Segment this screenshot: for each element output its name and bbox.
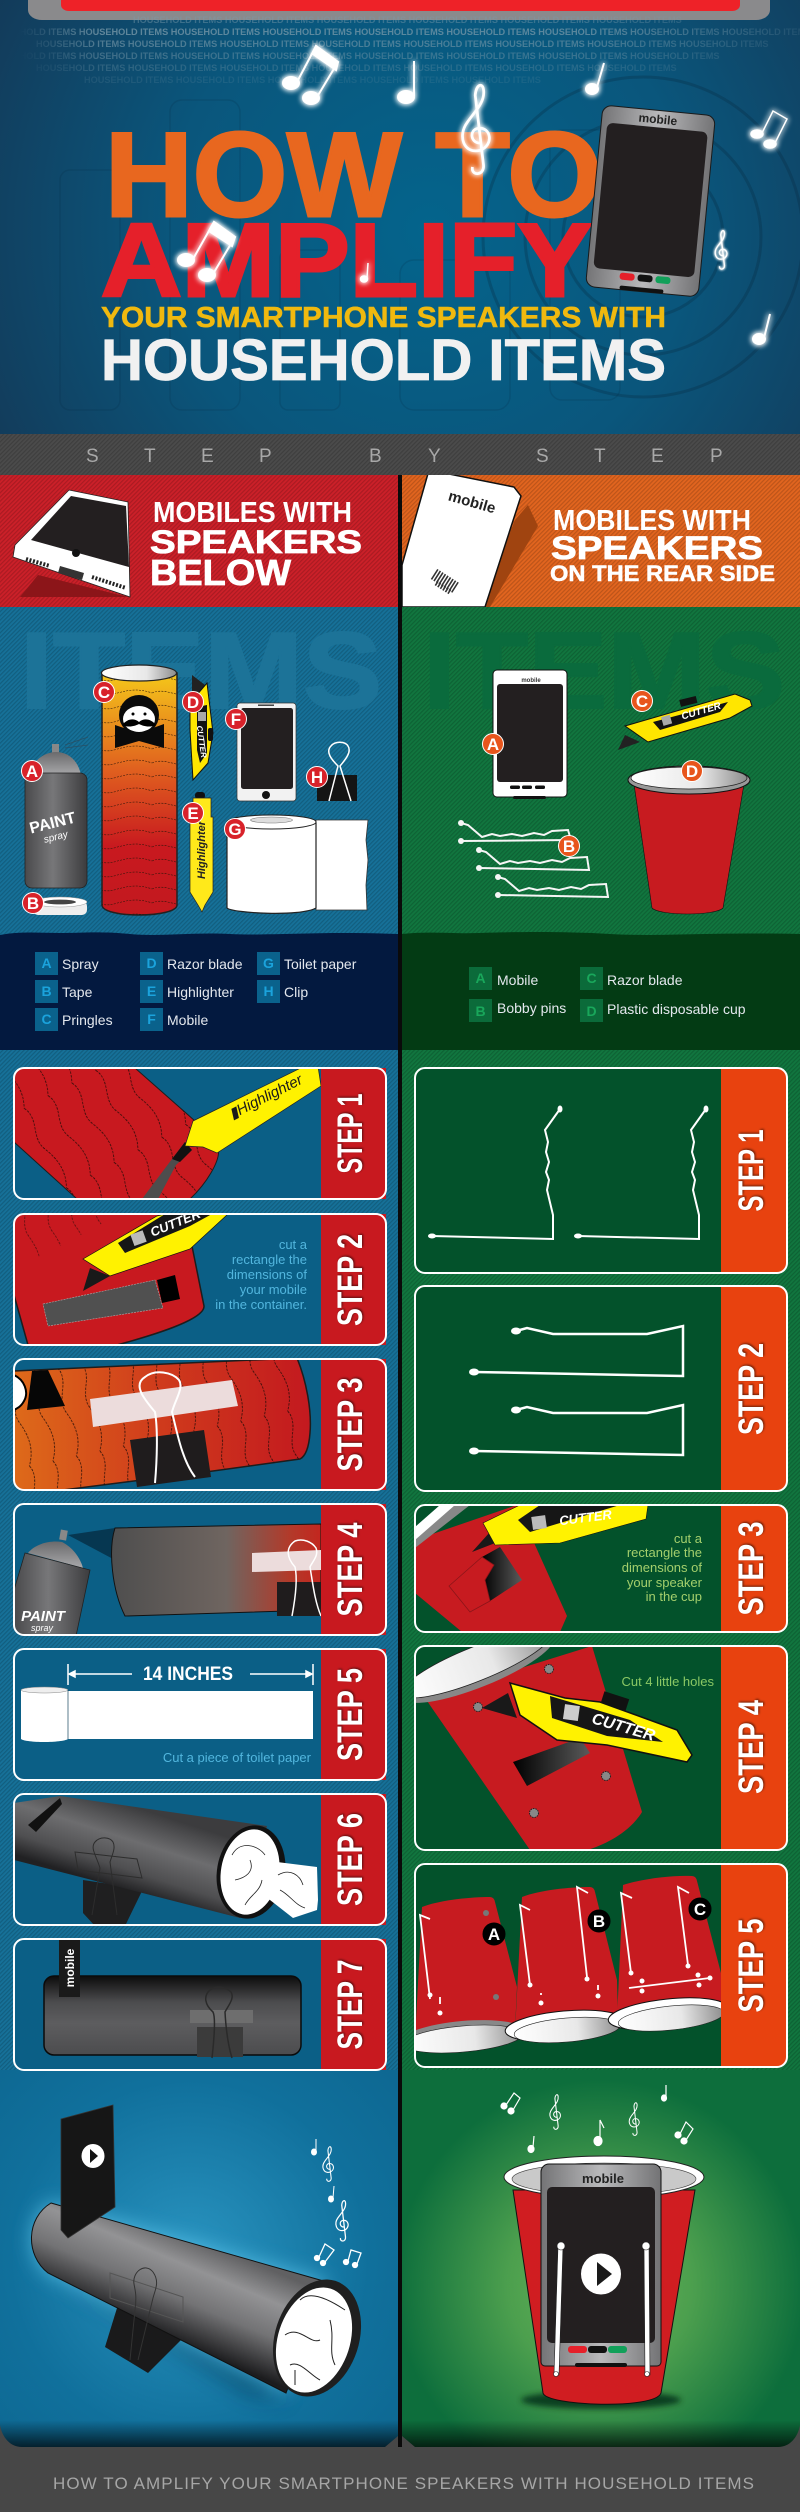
legend letters: B bbox=[41, 983, 52, 999]
dimension arrows bbox=[68, 1664, 313, 1685]
legend labels: Bobby pins bbox=[497, 1000, 566, 1016]
subtitle white: HOUSEHOLD ITEMS bbox=[101, 328, 666, 393]
step label: STEP 2 bbox=[331, 1234, 370, 1326]
item badges: D bbox=[686, 762, 698, 781]
item badges bbox=[482, 690, 702, 856]
legend labels: Plastic disposable cup bbox=[607, 1001, 746, 1017]
item badges: C bbox=[636, 692, 648, 711]
panel: left step 1 bbox=[14, 1060, 386, 1199]
icon: pringles can bbox=[102, 665, 177, 915]
icon: tape bbox=[33, 897, 87, 915]
icon: painted tube bbox=[31, 2203, 327, 2393]
step label: STEP 2 bbox=[732, 1343, 771, 1435]
instruction text: rectangle the bbox=[627, 1545, 702, 1560]
icon: spray can: PAINT bbox=[28, 810, 78, 837]
panel: header mobiles with speakers on the rear side bbox=[402, 470, 800, 607]
repeating background words: HOUSEHOLD ITEMS HOUSEHOLD ITEMS HOUSEHOLD ITEMS HOUSEHOLD ITEMS HOUSEHOLD ITEMS HOUSEHOLD ITEMS HOUSEHOLD ITEMS bbox=[36, 63, 677, 73]
heading text: SPEAKERS bbox=[551, 530, 763, 566]
item badges: C bbox=[98, 683, 110, 702]
instruction text: your mobile bbox=[240, 1282, 307, 1297]
title: amplify: AMPLIFY bbox=[101, 203, 592, 319]
left legend bbox=[0, 932, 398, 1050]
legend letters bbox=[475, 970, 597, 1019]
footer text: HOW TO AMPLIFY YOUR SMARTPHONE SPEAKERS WITH HOUSEHOLD ITEMS bbox=[53, 2474, 754, 2493]
panel: right step 3 bbox=[415, 1505, 787, 1632]
step label: STEP 1 bbox=[331, 1094, 370, 1174]
legend letters: H bbox=[263, 983, 274, 999]
legend letters: D bbox=[586, 1003, 597, 1019]
illustration: toilet paper roll bbox=[21, 1687, 313, 1742]
icon: red cup bbox=[504, 2156, 704, 2404]
item badges: A bbox=[487, 735, 499, 754]
step label: STEP 5 bbox=[331, 1668, 370, 1761]
illustration: cutting the cup: CUTTER bbox=[558, 1507, 613, 1528]
panel: right step 2 bbox=[415, 1286, 787, 1491]
legend letters: G bbox=[263, 955, 274, 971]
icon: treble clef large bbox=[463, 85, 489, 174]
panel: right step 5 bbox=[400, 1864, 787, 2067]
instruction text: cut a bbox=[674, 1531, 703, 1546]
instruction text: in the cup bbox=[646, 1589, 702, 1604]
step label: STEP 3 bbox=[331, 1378, 370, 1472]
legend labels: Toilet paper bbox=[284, 956, 357, 972]
icon: spray can bbox=[25, 737, 88, 888]
heading text: BELOW bbox=[150, 552, 291, 593]
illustration: cutting the can: CUTTER bbox=[148, 1206, 203, 1240]
subtitle yellow: YOUR SMARTPHONE SPEAKERS WITH bbox=[101, 302, 666, 334]
instruction text: cut a bbox=[279, 1237, 308, 1252]
icon: highlighter bbox=[190, 792, 213, 912]
instruction text: in the container. bbox=[215, 1297, 307, 1312]
heading text: MOBILES WITH bbox=[153, 497, 352, 529]
legend letters: E bbox=[147, 983, 156, 999]
step label: STEP 1 bbox=[732, 1130, 771, 1212]
icon: mobile bbox=[493, 670, 567, 799]
illustration: tube with mobile inserted bbox=[44, 1939, 301, 2058]
heading text bbox=[150, 497, 362, 593]
item badges: E bbox=[187, 804, 199, 823]
step label: STEP 4 bbox=[732, 1700, 771, 1794]
illustration: highlighter marking the can bbox=[14, 1060, 321, 1199]
icon: mobile standing in tube bbox=[61, 2105, 115, 2238]
left items illustration bbox=[22, 665, 368, 915]
instruction text: dimensions of bbox=[227, 1267, 307, 1282]
item badges: H bbox=[311, 768, 323, 787]
illustration: cutting the can bbox=[14, 1206, 228, 1345]
illustration: spray painting the can: spray bbox=[31, 1623, 54, 1633]
step label: STEP 3 bbox=[732, 1522, 771, 1616]
panel: left step 7 bbox=[14, 1939, 386, 2070]
icon: treble clefs bbox=[550, 2095, 639, 2135]
instruction text: Cut 4 little holes bbox=[622, 1674, 714, 1689]
panel: right step 1 bbox=[415, 1068, 787, 1273]
illustration: cutting holes in the cup bbox=[416, 1647, 693, 1849]
icon: clip and tape outlines bbox=[110, 2268, 183, 2360]
icon: binder clip stand bbox=[105, 2308, 181, 2373]
icon: razor blade: CUTTER bbox=[195, 725, 208, 759]
step label: STEP 7 bbox=[331, 1960, 370, 2050]
illustration: cutting holes in the cup: CUTTER bbox=[590, 1711, 657, 1745]
heading text: ON THE REAR SIDE bbox=[550, 561, 775, 586]
bottom vignette bbox=[0, 2420, 800, 2447]
icon: tube opening with paper bbox=[259, 2268, 375, 2408]
watermark: items left: ITEMS bbox=[20, 610, 382, 732]
step label: STEP 6 bbox=[331, 1813, 370, 1906]
icon: mobile phone bbox=[237, 703, 296, 801]
dimension label: 14 INCHES bbox=[143, 1664, 233, 1685]
item badges: F bbox=[231, 710, 241, 729]
legend letters: A bbox=[475, 970, 486, 986]
right legend bbox=[402, 932, 800, 1050]
step by step banner bbox=[0, 434, 800, 475]
repeating background words: HOUSEHOLD ITEMS HOUSEHOLD ITEMS HOUSEHOLD ITEMS HOUSEHOLD ITEMS HOUSEHOLD ITEMS HOUSEHOLD ITEMS HOUSEHOLD ITEMS HOUSEHOLD ITEMS bbox=[0, 51, 719, 61]
illustration: cutting the cup bbox=[415, 1505, 648, 1632]
heading text: MOBILES WITH bbox=[553, 505, 751, 537]
icon: razor blade: CUTTER bbox=[680, 701, 723, 722]
instruction text bbox=[622, 1531, 703, 1604]
repeating background words: HOUSEHOLD ITEMS HOUSEHOLD ITEMS HOUSEHOLD ITEMS HOUSEHOLD ITEMS HOUSEHOLD ITEMS bbox=[84, 75, 541, 85]
repeating background words: HOUSEHOLD ITEMS HOUSEHOLD ITEMS HOUSEHOLD ITEMS HOUSEHOLD ITEMS HOUSEHOLD ITEMS HOUSEHOLD ITEMS HOUSEHOLD ITEMS HOUSEHOLD ITEMS HOUSEHOLD ITEMS bbox=[0, 27, 800, 37]
instruction text: rectangle the bbox=[232, 1252, 307, 1267]
legend letters: C bbox=[586, 970, 597, 986]
legend labels: Highlighter bbox=[167, 984, 234, 1000]
icon: smartphone bbox=[586, 105, 715, 297]
icon: mobile on cup bbox=[541, 2164, 661, 2367]
panel: left step 6 bbox=[14, 1794, 386, 1926]
watermark: items right: ITEMS bbox=[423, 610, 785, 732]
item badges: A bbox=[26, 762, 38, 781]
step by step banner: STEP bbox=[536, 446, 723, 467]
panel: left step 4 bbox=[14, 1504, 386, 1636]
step label: STEP 5 bbox=[732, 1918, 771, 2012]
legend labels: Clip bbox=[284, 984, 308, 1000]
music notes bbox=[312, 2139, 361, 2268]
panel: left column background bbox=[0, 607, 398, 2447]
instruction text: dimensions of bbox=[622, 1560, 702, 1575]
illustration: clip taped to the can bbox=[14, 1358, 310, 1490]
panel: right step 4 bbox=[414, 1645, 788, 1851]
instruction text: your speaker bbox=[627, 1575, 703, 1590]
icon: bobby pins over phone bbox=[554, 2242, 650, 2376]
legend squares bbox=[35, 952, 280, 1031]
right finished speaker scene bbox=[501, 2085, 704, 2409]
icon: mobile: mobile bbox=[521, 678, 541, 684]
repeating background words: HOUSEHOLD ITEMS HOUSEHOLD ITEMS HOUSEHOLD ITEMS HOUSEHOLD ITEMS HOUSEHOLD ITEMS HOUSEHOLD ITEMS bbox=[133, 15, 682, 25]
icon: phone rear with speaker grille bbox=[402, 470, 538, 607]
repeating background words bbox=[0, 15, 800, 85]
item badges bbox=[22, 682, 328, 914]
instruction text bbox=[215, 1237, 308, 1312]
icon: treble clefs bbox=[323, 2147, 348, 2241]
instruction text: Cut a piece of toilet paper bbox=[163, 1750, 312, 1765]
legend labels: Mobile bbox=[167, 1012, 208, 1028]
step by step banner: BY bbox=[369, 446, 441, 467]
icon: bobby pins bbox=[458, 820, 608, 898]
panel: left step 2 bbox=[14, 1206, 386, 1345]
icon: spray can: spray bbox=[43, 829, 70, 846]
background speaker rings bbox=[483, 77, 800, 397]
illustration: bent bobby pins bbox=[469, 1326, 683, 1455]
heading text: SPEAKERS bbox=[150, 524, 362, 560]
legend labels bbox=[62, 956, 357, 1028]
icon: razor blade bbox=[190, 675, 213, 780]
legend labels: Razor blade bbox=[607, 972, 683, 988]
icon: plastic cup bbox=[628, 766, 750, 914]
faint background household item outlines bbox=[60, 100, 620, 410]
legend labels: Spray bbox=[62, 956, 99, 972]
icon: toilet paper roll bbox=[227, 815, 368, 913]
illustration: spray painting the can: PAINT bbox=[21, 1608, 67, 1625]
item badges: B bbox=[563, 837, 575, 856]
legend letters: A bbox=[41, 955, 52, 971]
legend labels bbox=[497, 972, 746, 1017]
icon: smartphone: mobile bbox=[638, 111, 678, 128]
header hero panel bbox=[0, 0, 800, 434]
center divider bbox=[398, 475, 402, 2447]
icon: phone with bottom speakers bbox=[13, 490, 130, 597]
panel: left step 5 bbox=[14, 1649, 386, 1780]
right items illustration bbox=[458, 670, 752, 914]
illustration: highlighter marking the can: ▮Highlighter bbox=[226, 1071, 306, 1123]
repeating background words: HOUSEHOLD ITEMS HOUSEHOLD ITEMS HOUSEHOLD ITEMS HOUSEHOLD ITEMS HOUSEHOLD ITEMS HOUSEHOLD ITEMS HOUSEHOLD ITEMS HOUSEHOLD ITEMS bbox=[36, 39, 768, 49]
top grey tab with red bar bbox=[28, 0, 770, 20]
icon: razor blade bbox=[618, 694, 752, 750]
left finished speaker scene bbox=[31, 2105, 375, 2408]
music notes bbox=[501, 2085, 693, 2152]
icon: treble clef small bbox=[715, 231, 727, 269]
legend letters: F bbox=[147, 1011, 156, 1027]
cup badges: C bbox=[694, 1900, 706, 1919]
title: how to: HOW TO bbox=[105, 108, 602, 242]
panel: left step 3 bbox=[14, 1358, 386, 1490]
legend squares bbox=[469, 967, 603, 1022]
legend labels: Tape bbox=[62, 984, 93, 1000]
icon: binder clip bbox=[317, 742, 357, 801]
item badges: D bbox=[187, 693, 199, 712]
legend letters bbox=[41, 955, 274, 1027]
legend labels: Mobile bbox=[497, 972, 538, 988]
heading text bbox=[550, 505, 775, 586]
music notes bbox=[178, 46, 787, 344]
illustration: paper stuffed into painted tube bbox=[14, 1796, 318, 1926]
illustration: pins threaded through cups bbox=[400, 1876, 729, 2057]
panel: right column background bbox=[402, 607, 800, 2447]
legend letters: C bbox=[41, 1011, 52, 1027]
cup badges: A bbox=[488, 1925, 500, 1944]
step label: STEP 4 bbox=[331, 1522, 370, 1616]
legend labels: Razor blade bbox=[167, 956, 243, 972]
cup badges bbox=[483, 1898, 711, 1945]
item badges: B bbox=[27, 894, 39, 913]
icon: highlighter: Highlighter bbox=[196, 820, 208, 879]
item badges: G bbox=[228, 820, 242, 839]
icon: phone rear with speaker grille: mobile bbox=[446, 488, 497, 517]
illustration: straightened bobby pins bbox=[428, 1106, 708, 1239]
cup badges: B bbox=[593, 1912, 605, 1931]
illustration: tube with mobile inserted: mobile bbox=[63, 1948, 77, 1987]
icon: mobile on cup: mobile bbox=[582, 2171, 624, 2186]
illustration: spray painting the can bbox=[14, 1524, 321, 1636]
step by step banner: STEP bbox=[86, 446, 271, 467]
legend letters: D bbox=[146, 955, 157, 971]
legend labels: Pringles bbox=[62, 1012, 113, 1028]
legend letters: B bbox=[475, 1003, 486, 1019]
panel: header mobiles with speakers below bbox=[0, 475, 398, 607]
